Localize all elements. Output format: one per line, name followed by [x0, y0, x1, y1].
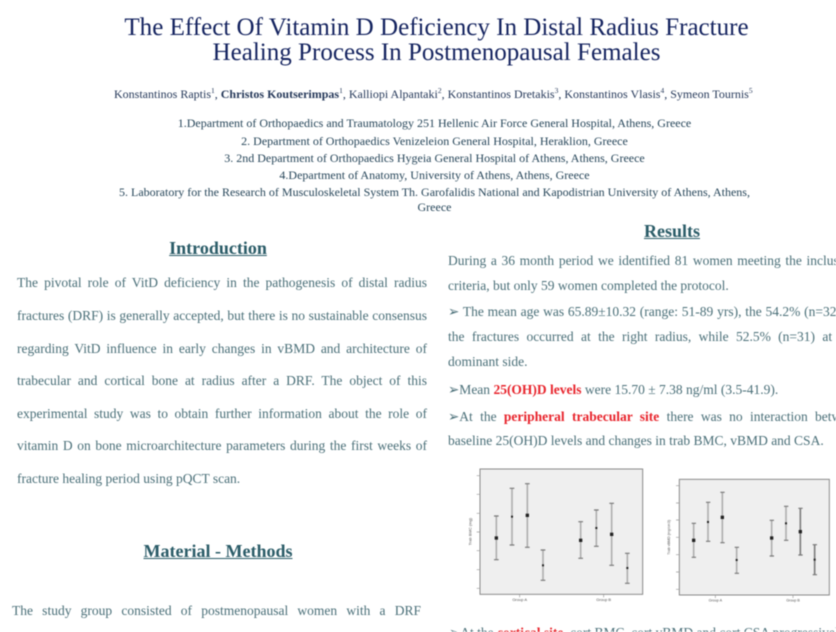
- chart: trabecular vBMD error bars: Group A: [709, 599, 723, 603]
- title: Healing Process In Postmenopausal Females: [212, 39, 660, 66]
- chart: trabecular vBMD error bars: Trab vBMD (mg/cm3): [667, 520, 671, 555]
- chart: trabecular BMC error bars: Group A: [512, 597, 527, 602]
- affiliations: [119, 116, 750, 214]
- text block: introduction: trabecular and cortical bone at radius after a DRF. The object of this: [17, 373, 427, 388]
- chart: trabecular vBMD error bars: [667, 478, 830, 603]
- chart: trabecular BMC error bars: Group B: [596, 597, 611, 602]
- affiliations: 5. Laboratory for the Research of Musculoskeletal System Th. Garofalidis National and Kapodistrian University of Athens, Athens,: [119, 185, 750, 199]
- text block: results: [448, 253, 836, 449]
- text block: methods: The study group consisted of postmenopausal women with a DRF: [12, 603, 421, 618]
- text block: introduction: vitamin D on bone microarchitecture parameters during the first weeks of: [17, 438, 427, 453]
- text block: results: dominant side.: [448, 354, 528, 369]
- text block: introduction: The pivotal role of VitD deficiency in the pathogenesis of distal radius: [17, 275, 427, 290]
- text block: introduction: fractures (DRF) is generally accepted, but there is no sustainable consensus: [17, 308, 427, 323]
- affiliations: 4.Department of Anatomy, University of Athens, Athens, Greece: [279, 168, 590, 182]
- affiliations: Greece: [418, 200, 451, 214]
- chart: trabecular BMC error bars: Trab BMC (mg): [468, 517, 473, 545]
- heading: introduction: Introduction: [169, 238, 267, 258]
- affiliations: 1.Department of Orthopaedics and Traumatology 251 Hellenic Air Force General Hospital, Athens, Greece: [178, 116, 691, 130]
- chart: trabecular BMC error bars: [468, 468, 644, 602]
- chart: trabecular vBMD error bars: Group B: [786, 599, 800, 603]
- affiliations: 2. Department of Orthopaedics Venizeleion General Hospital, Heraklion, Greece: [241, 134, 628, 148]
- text block: introduction: regarding VitD influence in early changes in vBMD and architecture of: [17, 341, 427, 356]
- affiliations: 3. 2nd Department of Orthopaedics Hygeia General Hospital of Athens, Athens, Greece: [224, 151, 645, 165]
- heading: results: Results: [644, 221, 700, 241]
- text block: results: ➢Mean 25(OH)D levels were 15.70 ± 7.38 ng/ml (3.5-41.9).: [448, 382, 778, 397]
- title: The Effect Of Vitamin D Deficiency In Distal Radius Fracture: [124, 14, 749, 41]
- authors: Konstantinos Raptis1, Christos Koutserimpas1, Kalliopi Alpantaki2, Konstantinos Dretakis3, Konstantinos Vlasis4, Symeon Tournis5: [114, 86, 753, 101]
- text block: introduction: fracture healing period using pQCT scan.: [17, 471, 240, 486]
- text block: introduction: experimental study was to obtain further information about the role of: [17, 406, 427, 421]
- text block: results: criteria, but only 59 women completed the protocol.: [448, 278, 729, 293]
- text block: introduction: [16, 275, 428, 487]
- text block: results: baseline 25(OH)D levels and changes in trab BMC, vBMD and CSA.: [448, 433, 824, 448]
- heading: material and methods: Material - Methods: [144, 541, 292, 561]
- title: [124, 14, 749, 66]
